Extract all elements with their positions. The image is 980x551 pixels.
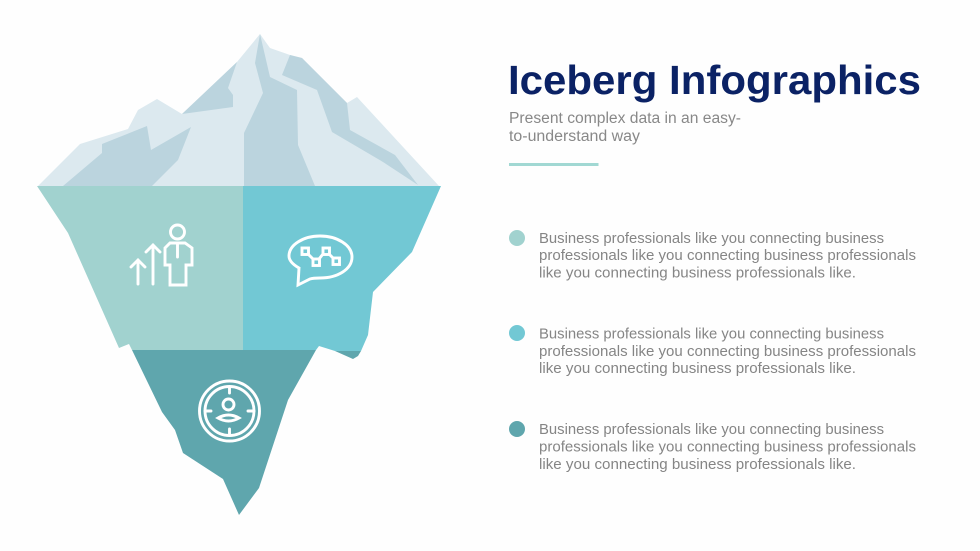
list item 1 (509, 230, 916, 282)
list item 3 (509, 421, 916, 473)
item 3 text (539, 422, 916, 473)
item 3 text: professionals like you connecting business professionals (539, 440, 916, 456)
item 2 text: professionals like you connecting business professionals (539, 344, 916, 360)
iceberg tip above water (38, 34, 439, 186)
mountain upper shadow (182, 62, 237, 114)
iceberg illustration (37, 34, 441, 515)
mountain centre shadow (244, 34, 315, 186)
subtitle (509, 110, 741, 145)
subtitle: to-understand way (509, 128, 640, 145)
item 3 text: like you connecting business professionals like. (539, 457, 856, 473)
item 2 text: Business professionals like you connecting business (539, 326, 884, 342)
item 1 text: Business professionals like you connecting business (539, 231, 884, 247)
icon: person with rising arrows (131, 225, 192, 285)
bullet 2 (509, 325, 525, 341)
subtitle: Present complex data in an easy- (509, 110, 741, 127)
icon: target with person (200, 381, 260, 441)
bullet 1 (509, 230, 525, 246)
list item 2 (509, 325, 916, 377)
panel: left section (37, 186, 243, 350)
icon: speech bubble with data line (289, 236, 352, 285)
mountain right shadow (282, 55, 418, 185)
item 1 text (539, 231, 916, 282)
title: Iceberg Infographics (508, 57, 921, 103)
item 2 text: like you connecting business professionals like. (539, 361, 856, 377)
item 1 text: professionals like you connecting business professionals (539, 248, 916, 264)
item 2 text (539, 326, 916, 377)
panel: right section (243, 186, 441, 351)
accent divider (509, 163, 598, 166)
bullet 3 (509, 421, 525, 437)
item 3 text: Business professionals like you connecting business (539, 422, 884, 438)
panel: bottom section (132, 350, 316, 515)
item 1 text: like you connecting business professionals like. (539, 266, 856, 282)
mountain left shadow (63, 126, 191, 186)
small dark sliver under right panel (335, 351, 361, 359)
mountain base shape (38, 34, 439, 186)
